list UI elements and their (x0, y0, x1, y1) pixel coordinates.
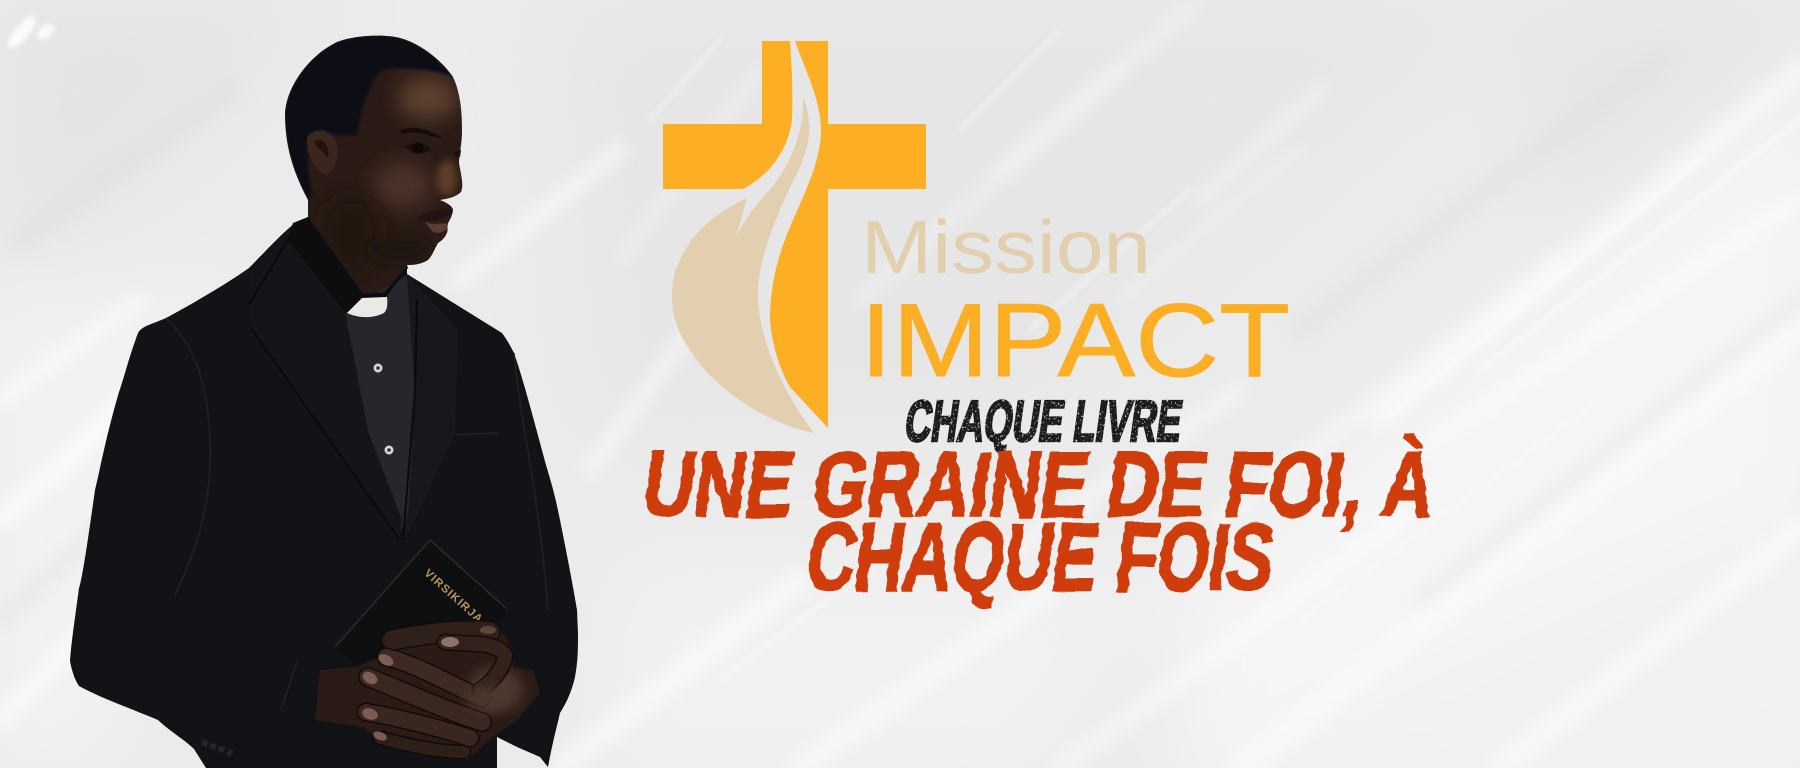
clerical collar band (287, 217, 408, 313)
jacket (70, 217, 578, 768)
slogan line 2: CHAQUE FOIS (800, 504, 1281, 611)
neck and head (285, 36, 462, 296)
eyebrow and eyes (400, 128, 443, 138)
flame (672, 97, 814, 433)
slogan (637, 432, 1442, 611)
sleeve buttons (202, 742, 232, 754)
slogan line 1: UNE GRAINE DE FOI, À (637, 432, 1442, 536)
ear (307, 131, 338, 175)
right lapel (403, 274, 458, 544)
hair (285, 36, 453, 200)
white collar tab (347, 297, 387, 317)
shirt buttons (374, 364, 394, 454)
mouth (417, 209, 453, 220)
word Mission: Mission (861, 205, 1151, 289)
left lapel (249, 240, 402, 539)
sleeve seams (166, 318, 548, 710)
word IMPACT: IMPACT (860, 283, 1290, 399)
cross left part (663, 41, 792, 189)
shirt (345, 275, 415, 531)
book title: VIRSIKIRJA (422, 567, 485, 626)
book (335, 540, 507, 665)
cross right part (770, 41, 926, 428)
Mission Impact logo (663, 41, 1290, 433)
man in clerical suit (70, 36, 578, 768)
subheading: CHAQUE LIVRE (901, 389, 1186, 454)
clasped hands (315, 625, 540, 760)
